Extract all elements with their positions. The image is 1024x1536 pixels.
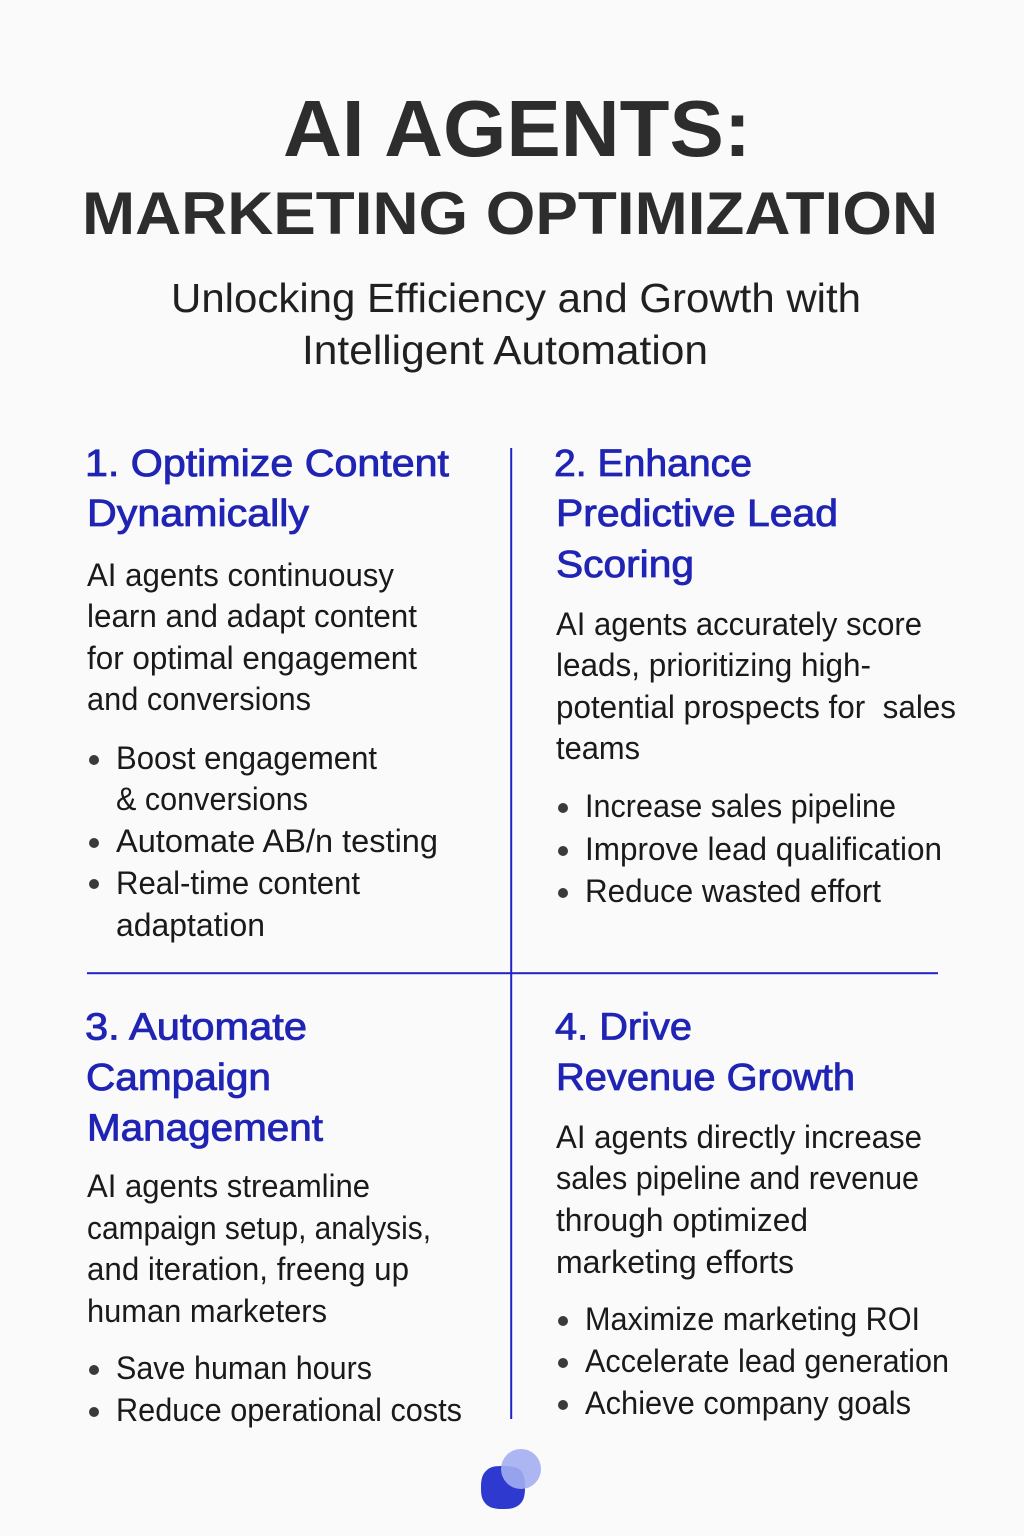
- body text: revenue growth: sales pipeline and revenue: [556, 1160, 919, 1196]
- body text: campaign management: human marketers: [87, 1293, 327, 1329]
- panel: optimize content: [85, 443, 449, 943]
- title: MARKETING OPTIMIZATION: [82, 180, 938, 247]
- heading: revenue growth: 4. Drive: [555, 1006, 692, 1048]
- bullet list: revenue growth: Achieve company goals: [585, 1385, 911, 1421]
- heading: predictive lead scoring: [554, 443, 838, 586]
- heading: predictive lead scoring: 2. Enhance: [554, 443, 752, 485]
- bullet list: campaign management: Save human hours: [116, 1350, 372, 1386]
- bullet list: revenue growth: Maximize marketing ROI: [585, 1301, 920, 1337]
- bullet list: optimize content: Boost engagement: [116, 740, 377, 776]
- body text: campaign management: AI agents streamline: [87, 1168, 370, 1204]
- bullet list: optimize content: Automate AB/n testing: [116, 823, 438, 859]
- heading: predictive lead scoring: Scoring: [556, 544, 694, 586]
- body text: optimize content: learn and adapt content: [87, 598, 417, 634]
- heading: optimize content: 1. Optimize Content: [85, 443, 449, 485]
- bullet list: predictive lead scoring: Reduce wasted effort: [585, 873, 881, 909]
- body text: campaign management: campaign setup, analysis,: [87, 1210, 431, 1246]
- bullet list: campaign management: [89, 1350, 462, 1428]
- panel: revenue growth: [555, 1006, 949, 1421]
- body text: predictive lead scoring: leads, prioritizing high-: [556, 647, 871, 683]
- bullet list: predictive lead scoring: Improve lead qualification: [585, 831, 942, 867]
- heading: campaign management: Campaign: [86, 1057, 271, 1099]
- body text: campaign management: [87, 1168, 431, 1329]
- bullet list: optimize content: adaptation: [116, 907, 265, 943]
- bullet list: predictive lead scoring: Increase sales pipeline: [585, 788, 896, 824]
- horizontal divider: [87, 972, 938, 974]
- body text: campaign management: and iteration, freeng up: [87, 1251, 409, 1287]
- panel: predictive lead scoring: [554, 443, 956, 909]
- bullet list: revenue growth: [558, 1301, 949, 1421]
- title: [82, 84, 938, 247]
- bullet list: revenue growth: Accelerate lead generation: [585, 1343, 949, 1379]
- body text: predictive lead scoring: [556, 606, 956, 766]
- heading: campaign management: 3. Automate: [85, 1006, 307, 1048]
- heading: optimize content: [85, 443, 449, 535]
- heading: predictive lead scoring: Predictive Lead: [556, 493, 838, 535]
- subtitle: [171, 275, 861, 373]
- heading: revenue growth: [555, 1006, 855, 1099]
- icon: overlapping shapes logo: [481, 1449, 541, 1509]
- body text: predictive lead scoring: potential prospects for sales: [556, 689, 956, 725]
- body text: predictive lead scoring: AI agents accurately score: [556, 606, 922, 642]
- body text: revenue growth: marketing efforts: [556, 1244, 794, 1280]
- body text: optimize content: for optimal engagement: [87, 640, 417, 676]
- bullet list: optimize content: [89, 740, 438, 943]
- bullet list: optimize content: Real-time content: [116, 865, 360, 901]
- title: AI AGENTS:: [283, 84, 751, 173]
- bullet list: predictive lead scoring: [558, 788, 942, 909]
- bullet list: optimize content: & conversions: [116, 781, 308, 817]
- body text: revenue growth: through optimized: [556, 1202, 808, 1238]
- bullet list: campaign management: Reduce operational costs: [116, 1392, 462, 1428]
- subtitle: Unlocking Efficiency and Growth with: [171, 275, 861, 321]
- body text: optimize content: [87, 557, 417, 717]
- body text: revenue growth: [556, 1119, 922, 1280]
- body text: revenue growth: AI agents directly increase: [556, 1119, 922, 1155]
- heading: campaign management: [85, 1006, 323, 1150]
- heading: optimize content: Dynamically: [87, 493, 309, 535]
- vertical divider: [510, 448, 512, 1419]
- subtitle: Intelligent Automation: [302, 327, 708, 373]
- heading: campaign management: Management: [87, 1108, 323, 1150]
- panel: campaign management: [85, 1006, 462, 1428]
- body text: optimize content: AI agents continuousy: [87, 557, 394, 593]
- body text: optimize content: and conversions: [87, 681, 311, 717]
- heading: revenue growth: Revenue Growth: [556, 1057, 855, 1099]
- body text: predictive lead scoring: teams: [556, 730, 640, 766]
